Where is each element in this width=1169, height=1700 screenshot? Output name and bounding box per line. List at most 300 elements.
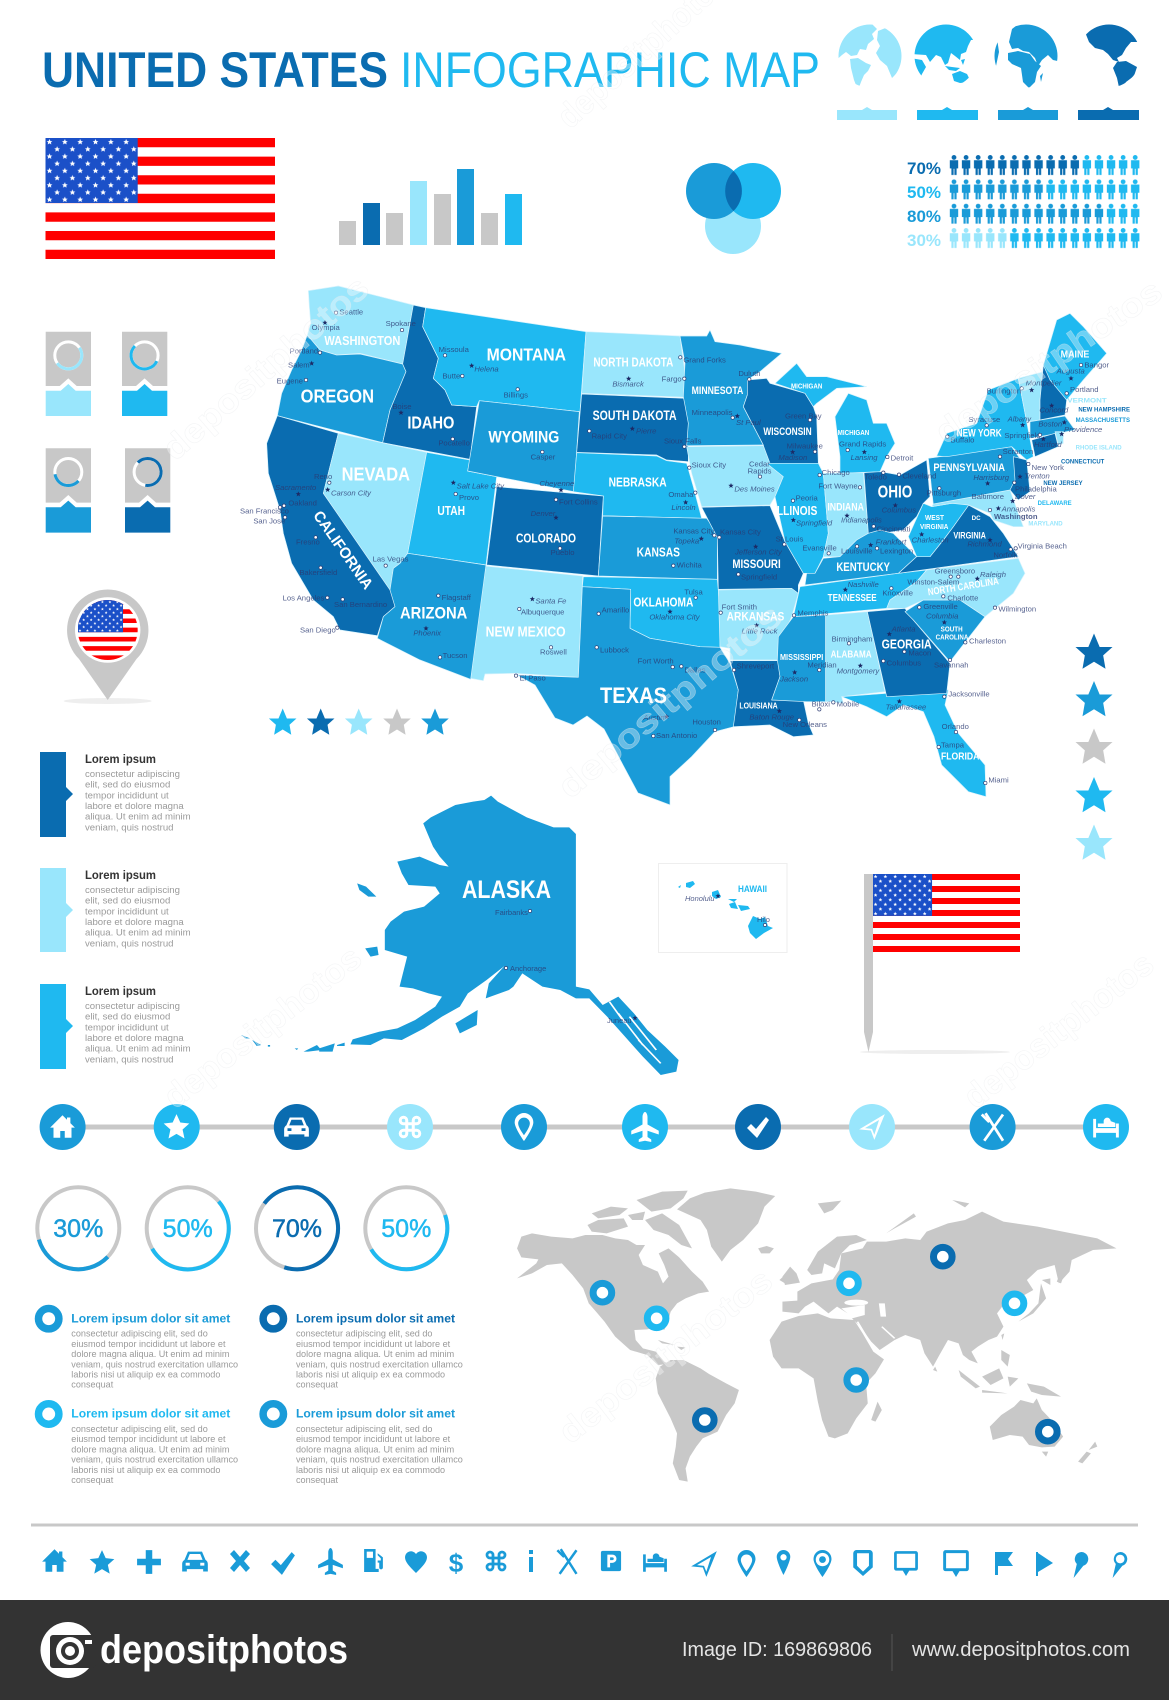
city names west: Salem — [288, 360, 310, 369]
Asia and Oceania islands — [658, 1200, 1097, 1463]
city names east: Knoxville — [882, 589, 913, 598]
step: plane — [622, 1104, 668, 1150]
city names west: Grand Forks — [683, 355, 726, 364]
divider rule — [31, 1524, 1138, 1526]
state: Alabama — [826, 612, 885, 703]
icon: home — [42, 1549, 67, 1572]
state: Rhode Island — [1055, 432, 1063, 445]
state: Louisiana — [730, 661, 813, 737]
icon: wide bubble — [943, 1550, 969, 1577]
watermarks: depositphotos — [552, 1261, 780, 1451]
city names east: Madison — [778, 453, 807, 462]
city names east: Sioux City — [692, 461, 726, 470]
row label values: 70% — [907, 159, 941, 178]
city names east: Norfolk — [993, 550, 1018, 559]
state names east: MICHIGAN — [838, 428, 869, 437]
state: Montana — [423, 308, 586, 412]
Greenland — [677, 1188, 775, 1262]
state names west: SOUTH DAKOTA — [593, 407, 677, 423]
city names west: Santa Fe — [535, 597, 566, 606]
globe: atlantic view — [838, 24, 902, 86]
rating stars row — [269, 708, 449, 735]
state: North Dakota — [582, 332, 688, 397]
small state callouts: NEW HAMPSHIRE — [1078, 406, 1130, 413]
state: Kansas — [598, 516, 717, 579]
city names west: Albuquerque — [521, 608, 564, 617]
step: car — [274, 1104, 320, 1150]
state names east: MAINE — [1061, 349, 1090, 360]
city names east — [673, 361, 1109, 785]
info item 2: eiusmod tempor incididunt ut labore et — [296, 1339, 451, 1349]
state names west: KANSAS — [637, 546, 680, 560]
info item 4: consectetur adipiscing elit, sed do — [296, 1424, 432, 1434]
info item 1: consectetur adipiscing elit, sed do — [71, 1329, 208, 1339]
tab 1 — [40, 752, 73, 837]
city names west: Casper — [531, 452, 556, 461]
state: New Mexico — [471, 566, 583, 681]
city names west: Roswell — [540, 648, 567, 657]
state: New Hampshire — [1040, 365, 1067, 420]
city names west: Denver — [531, 509, 556, 518]
state names east: DC — [972, 515, 981, 522]
icon: car — [182, 1552, 208, 1572]
state: California — [267, 416, 395, 636]
icon: navigation arrow — [691, 1551, 717, 1577]
city names east: Nashville — [848, 580, 879, 589]
text panel 2: aliqua. Ut enim ad minim — [85, 928, 191, 939]
state: Tennessee — [793, 570, 927, 617]
city names east: Cleveland — [902, 471, 936, 480]
state: New Jersey — [1010, 457, 1030, 500]
city names east: Greenville — [923, 602, 958, 611]
info item 4: laboris nisi ut aliquip ex ea commodo — [296, 1465, 445, 1475]
info item 4: consequat — [296, 1475, 338, 1485]
city names west: Rapid City — [592, 431, 627, 440]
city names east: Houston — [692, 717, 721, 726]
city names east: St Paul — [736, 418, 761, 427]
city names east: Kansas City — [673, 526, 714, 535]
US map: state shapes west — [267, 286, 738, 805]
text panel 3: consectetur adipiscing — [85, 1001, 180, 1012]
city names east: Scranton — [1003, 447, 1033, 456]
Africa — [770, 1313, 884, 1438]
panel: four tag markers — [46, 332, 170, 533]
watermarks: depositphotos — [157, 939, 369, 1116]
city names east: Indianapolis — [841, 516, 882, 525]
city names west: Sacramento — [275, 483, 317, 492]
timeline line — [62, 1124, 1106, 1130]
icon: pin dot — [777, 1550, 790, 1575]
gauge 30% — [37, 1187, 119, 1269]
venn diagram — [686, 163, 781, 254]
city names east: Mobile — [837, 700, 859, 709]
state names west: IDAHO — [407, 412, 454, 432]
text panel 3: elit, sed do eiusmod — [85, 1012, 170, 1023]
state: Pennsylvania — [928, 447, 1023, 505]
state: Utah — [408, 452, 497, 565]
city names east: Savannah — [934, 660, 968, 669]
city names east: Frankfort — [876, 537, 907, 546]
tab 3 — [40, 984, 73, 1069]
small state callouts: MASSACHUSETTS — [1076, 417, 1130, 424]
city names east: Concord — [1039, 405, 1069, 414]
gauge 70%: 70% — [272, 1215, 322, 1243]
city names west: Missoula — [439, 345, 470, 354]
city markers west — [278, 311, 697, 738]
info item 3: eiusmod tempor incididunt ut labore et — [71, 1434, 226, 1444]
city names east: Dover — [1015, 492, 1036, 501]
state: Wyoming — [468, 401, 579, 492]
row label values: 80% — [907, 207, 941, 226]
step: command — [387, 1104, 433, 1150]
city names east: Grand Rapids — [839, 440, 886, 449]
city names east: Macon — [908, 649, 931, 658]
city names west: San Bernardino — [334, 600, 387, 609]
state: Massachusetts — [1030, 416, 1075, 438]
info item 3 — [38, 1404, 238, 1485]
city names east: Montpelier — [1026, 379, 1062, 388]
icon: cross — [230, 1550, 250, 1572]
info item 1: dolore magna aliqua. Ut enim ad minim — [71, 1349, 230, 1359]
city names east: Portland — [1070, 385, 1099, 394]
step: bed — [1083, 1104, 1129, 1150]
info item 1: consequat — [71, 1380, 114, 1390]
text panel 1: aliqua. Ut enim ad minim — [85, 812, 191, 823]
text panel 1: veniam, quis nostrud — [85, 822, 174, 833]
city names east: Springfield — [796, 519, 833, 528]
city names east: Tallahassee — [886, 702, 926, 711]
watermarks: depositphotos — [957, 945, 1161, 1116]
state names east: CAROLINA — [936, 632, 969, 641]
city names west: Pueblo — [551, 548, 575, 557]
icon: heart — [405, 1551, 427, 1573]
city names east: Orlando — [942, 722, 969, 731]
Hawaii inset: Hilo — [757, 915, 770, 924]
Alaska islands — [241, 883, 478, 1052]
city names west: Eugene — [277, 376, 303, 385]
city names west: San Francisco — [240, 506, 289, 515]
Hawaii inset: HAWAII — [738, 884, 767, 894]
state names east: GEORGIA — [882, 636, 932, 651]
info item 2: Lorem ipsum dolor sit amet — [296, 1313, 455, 1325]
inland seas — [844, 1300, 886, 1317]
state: Connecticut — [1032, 433, 1058, 457]
city names east: Duluth — [738, 369, 760, 378]
city names east: Hartford — [1034, 440, 1062, 449]
city names east: Wichita — [677, 561, 703, 570]
state: Nebraska — [573, 453, 702, 518]
icon: fuel — [364, 1549, 383, 1572]
step: cutlery — [970, 1104, 1016, 1150]
state names east: TENNESSEE — [828, 593, 877, 604]
city names west: Butte — [442, 371, 460, 380]
city names west: Las Vegas — [373, 555, 409, 564]
state names east: ARKANSAS — [727, 610, 784, 624]
US map: western labels and cities — [240, 308, 726, 740]
state: Oregon — [277, 335, 406, 443]
step: home — [40, 1104, 86, 1150]
globe: americas view — [1086, 24, 1138, 86]
info item 1: eiusmod tempor incididunt ut labore et — [71, 1339, 226, 1349]
city names west: Pocatello — [438, 438, 470, 447]
city names east: Jacksonville — [948, 690, 990, 699]
state: Minnesota — [680, 330, 782, 446]
city names east: Providence — [1064, 425, 1102, 434]
city names west: San Antonio — [656, 731, 697, 740]
city names west: Pierre — [636, 426, 656, 435]
state names west: NEBRASKA — [609, 475, 667, 490]
watermarks: depositphotos — [155, 269, 376, 468]
info item 3: veniam, quis nostrud exercitation ullamco — [71, 1455, 238, 1465]
marker 4 — [125, 448, 170, 533]
city names east: Annapolis — [1001, 504, 1035, 513]
step: check — [735, 1104, 781, 1150]
state names west: OREGON — [301, 386, 374, 407]
step: send — [849, 1104, 895, 1150]
state: Michigan upper — [775, 363, 867, 407]
icon: tag pin — [853, 1550, 873, 1576]
text panel 2: Lorem ipsum — [85, 868, 156, 882]
icon: plus — [137, 1550, 161, 1574]
text panel 2: veniam, quis nostrud — [85, 938, 174, 949]
state: Vermont — [1018, 372, 1043, 422]
info item 1: laboris nisi ut aliquip ex ea commodo — [71, 1370, 220, 1380]
North America — [517, 1233, 709, 1365]
city names west: Helena — [474, 365, 499, 374]
city names east: Winston-Salem — [907, 577, 959, 586]
state: Illinois — [767, 463, 828, 573]
info item 4: eiusmod tempor incididunt ut labore et — [296, 1434, 451, 1444]
info item 1 — [38, 1308, 238, 1390]
city names east: Boston — [1038, 420, 1062, 429]
city names west: Olympia — [312, 323, 340, 332]
text panel 1: consectetur adipiscing — [85, 769, 180, 780]
city names east: Charleston — [912, 536, 949, 545]
city names east: Kansas City — [720, 527, 761, 536]
flag: United States — [46, 138, 275, 259]
state names east: KENTUCKY — [836, 560, 890, 574]
city names east: Biloxi — [812, 700, 830, 709]
state names west: ARIZONA — [400, 603, 467, 622]
city names west: Salt Lake City — [457, 482, 505, 491]
city names east: Birmingham — [832, 634, 873, 643]
info item 4: dolore magna aliqua. Ut enim ad minim — [296, 1444, 454, 1454]
timeline icons — [40, 1104, 1129, 1150]
gauge 70% — [256, 1187, 338, 1269]
info item 2: consequat — [296, 1380, 338, 1390]
state names east: LOUISIANA — [739, 701, 778, 711]
info item 3: laboris nisi ut aliquip ex ea commodo — [71, 1465, 220, 1475]
icon: cutlery — [557, 1549, 576, 1574]
state names east: NORTH CAROLINA — [927, 576, 1000, 598]
state names east: WEST — [925, 513, 944, 522]
info item 2: veniam, quis nostrud exercitation ullamco — [296, 1359, 463, 1369]
city names east: Raleigh — [980, 570, 1006, 579]
Madagascar — [871, 1402, 882, 1422]
city names east: Green Bay — [785, 411, 822, 420]
city markers east — [672, 363, 1083, 785]
city names east: Cedar — [749, 460, 770, 469]
city names east: Greensboro — [935, 566, 975, 575]
state: Arkansas — [718, 588, 798, 660]
gauge 30%: 30% — [53, 1215, 103, 1243]
city names west: Boise — [392, 402, 411, 411]
state: South Carolina — [905, 600, 985, 662]
city names east: Charleston — [969, 637, 1006, 646]
marker 2 — [122, 332, 167, 416]
city names east: Harrisburg — [973, 473, 1010, 482]
state: Mississippi — [772, 615, 826, 702]
text panel 3 — [40, 984, 191, 1069]
city names west: Carson City — [331, 489, 372, 498]
bar chart — [339, 169, 522, 245]
city names east: Tampa — [941, 740, 965, 749]
city names west: Fresno — [296, 537, 320, 546]
city names west: Oklahoma City — [649, 612, 701, 621]
state names west: NEW MEXICO — [486, 625, 566, 641]
title: INFOGRAPHIC MAP — [400, 42, 820, 98]
state: Ohio — [864, 460, 930, 533]
city names east: Montgomery — [837, 667, 880, 676]
text panel 1: tempor incididunt ut — [85, 790, 169, 801]
state names east: VIRGINIA — [920, 522, 949, 531]
city names east: Wilmington — [998, 605, 1036, 614]
icon: round pin outline — [1113, 1552, 1127, 1578]
globe: asia view — [914, 24, 973, 83]
city names east: Philadelphia — [1015, 484, 1057, 493]
Iceland — [758, 1246, 774, 1253]
city names east: Louisville — [841, 546, 872, 555]
state names east: MISSOURI — [732, 557, 781, 571]
small state callouts: MARYLAND — [1028, 521, 1063, 528]
icon: dollar: $ — [449, 1548, 464, 1578]
state: Nevada — [323, 433, 427, 590]
wordmark: depositphotos — [100, 1628, 348, 1672]
state: Missouri — [702, 506, 803, 597]
city names west: Tulsa — [684, 587, 704, 596]
row label values — [907, 159, 941, 250]
city names west: Sioux Falls — [664, 436, 702, 445]
city names west: Omaha — [668, 490, 694, 499]
right column stars — [1075, 634, 1113, 860]
city names east: Jefferson City — [734, 548, 783, 557]
city names west: Oakland — [288, 498, 317, 507]
state names west: WYOMING — [488, 428, 559, 447]
state names east: PENNSYLVANIA — [933, 462, 1005, 474]
city names west: Spokane — [386, 319, 416, 328]
city names west: Amarillo — [602, 605, 629, 614]
info item 3: dolore magna aliqua. Ut enim ad minim — [71, 1444, 230, 1454]
title — [42, 42, 820, 98]
city names east: Cincinnati — [877, 525, 911, 534]
icon: flag — [995, 1552, 1013, 1575]
state: Virginia — [898, 505, 1018, 573]
row label values: 50% — [907, 183, 941, 202]
state names east: MINNESOTA — [692, 385, 743, 397]
city names east: Richmond — [967, 540, 1003, 549]
city names east: Pittsburgh — [927, 488, 961, 497]
city names west: Bismarck — [612, 380, 645, 389]
state names west: NORTH DAKOTA — [593, 356, 673, 370]
city names west: Reno — [314, 472, 332, 481]
city names west — [240, 308, 726, 740]
text panel 1 — [40, 752, 191, 837]
city names east: Baltimore — [972, 492, 1004, 501]
step: star — [154, 1104, 200, 1150]
city names west: Phoenix — [413, 629, 442, 638]
state names west: COLORADO — [516, 532, 576, 546]
state: Georgia — [867, 608, 950, 697]
city names west: Bakersfield — [299, 568, 337, 577]
city names east: Meridian — [807, 661, 837, 670]
Scandinavia — [807, 1235, 867, 1275]
panhandle channels — [609, 1002, 661, 1063]
state: Maryland — [932, 490, 1023, 527]
city names east: St Louis — [776, 534, 804, 543]
icon: parking — [601, 1551, 621, 1571]
info item 4 — [263, 1404, 463, 1485]
city names east: Fort Smith — [722, 602, 757, 611]
text panel 3: Lorem ipsum — [85, 984, 156, 998]
city names east: Lansing — [851, 453, 878, 462]
people percentage chart — [907, 155, 1141, 250]
info item 2: consectetur adipiscing elit, sed do — [296, 1329, 432, 1339]
state names west — [301, 333, 693, 708]
text panel 2: consectetur adipiscing — [85, 885, 180, 896]
marker 3 — [46, 448, 91, 533]
US map: state shapes east — [680, 313, 1107, 797]
state names west: UTAH — [437, 503, 465, 518]
city names west: Seattle — [339, 308, 363, 317]
small state callouts: VERMONT — [1067, 397, 1107, 404]
state names east: VIRGINIA — [953, 530, 986, 540]
text panel 1: elit, sed do eiusmod — [85, 780, 170, 791]
Alaska mainland — [350, 796, 679, 1075]
icon: bed — [643, 1553, 667, 1572]
city names west: Lincoln — [671, 503, 696, 512]
small state callouts: DELAWARE — [1038, 500, 1072, 507]
city names east: Columbus — [887, 658, 921, 667]
gauges — [37, 1187, 447, 1269]
city names east: Little Rock — [742, 626, 779, 635]
Canadian Arctic — [587, 1191, 692, 1248]
website: www.depositphotos.com — [911, 1639, 1130, 1661]
city names west: Portland — [290, 346, 318, 355]
state names east: MICHIGAN — [791, 381, 822, 390]
city names east: Topeka — [674, 536, 699, 545]
state: Colorado — [487, 487, 603, 576]
state names east: MISSISSIPPI — [780, 652, 823, 662]
city names east: Springfield — [1004, 431, 1041, 440]
icon: plane — [318, 1548, 343, 1575]
text panel 2: elit, sed do eiusmod — [85, 896, 170, 907]
city names east: Bangor — [1084, 361, 1109, 370]
small state callouts — [1028, 397, 1130, 528]
city names west: Provo — [459, 493, 479, 502]
city names east: Washington — [994, 512, 1038, 521]
city names east: Detroit — [891, 454, 914, 463]
city names west: San Jose — [253, 516, 285, 525]
city names east: Jackson — [779, 674, 808, 683]
state names west: MONTANA — [487, 345, 566, 365]
icon: pin target — [814, 1550, 832, 1577]
icon: star — [90, 1550, 114, 1574]
info item 2: dolore magna aliqua. Ut enim ad minim — [296, 1349, 454, 1359]
city names east: Augusta — [1056, 366, 1085, 375]
city names west: Austin — [642, 713, 665, 722]
icon: pin outline — [738, 1550, 756, 1577]
info item 1: veniam, quis nostrud exercitation ullamco — [71, 1359, 238, 1369]
